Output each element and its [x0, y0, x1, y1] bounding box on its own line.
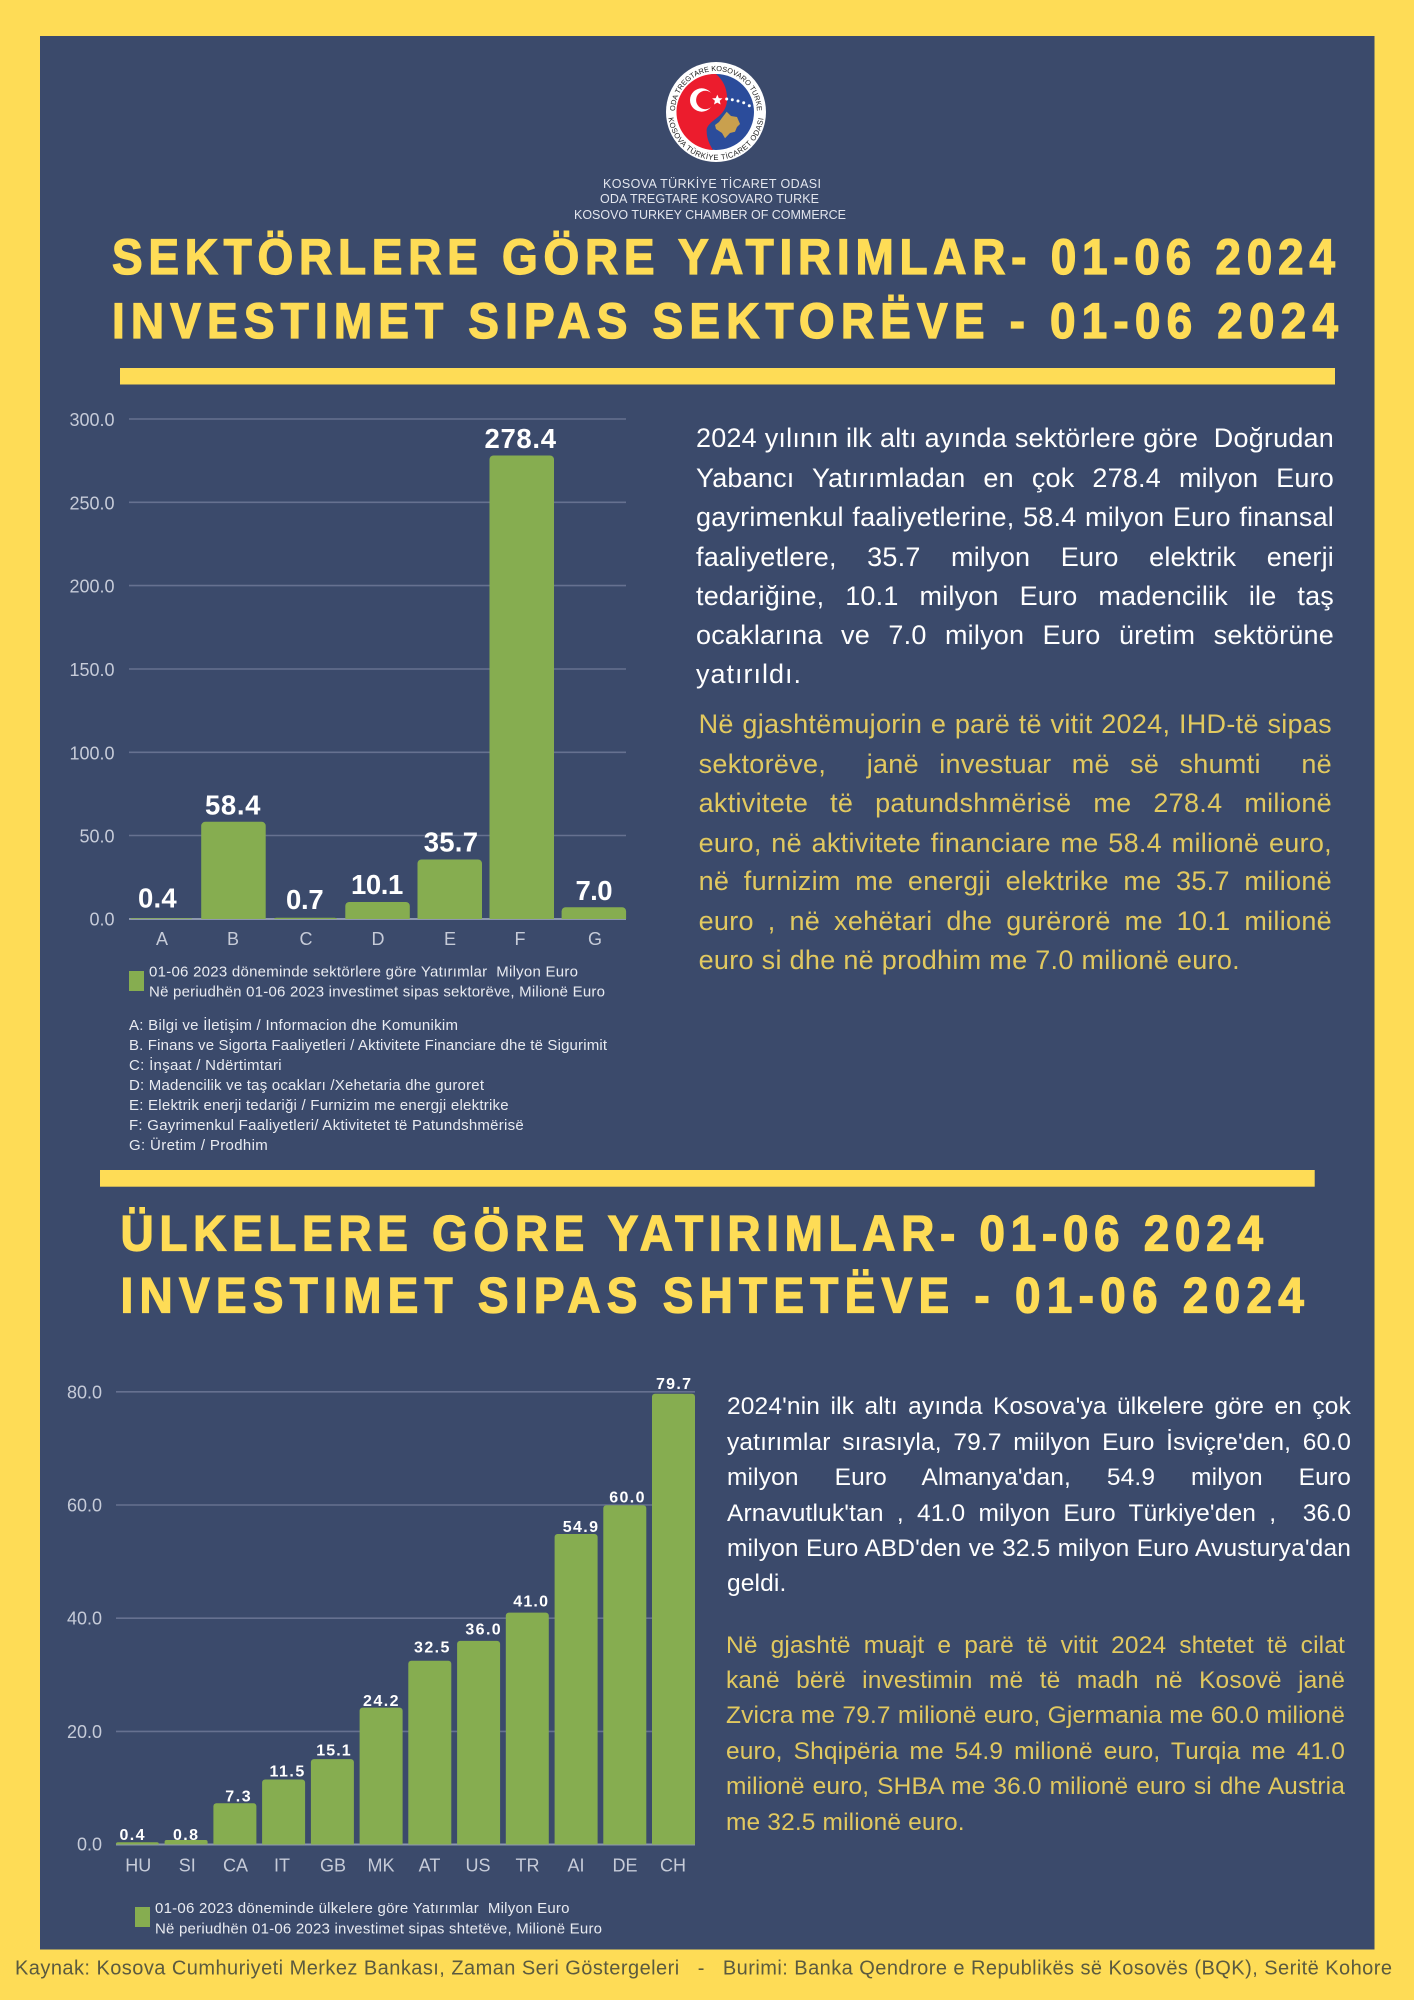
bar chart: sectors — [69, 410, 626, 949]
sector key list: B. Finans ve Sigorta Faaliyetleri / Aktivitete Financiare dhe të Sigurimit — [129, 1037, 608, 1054]
value labels: 0.8 — [173, 1827, 198, 1844]
value labels: 41.0 — [513, 1593, 548, 1610]
value labels: 36.0 — [465, 1622, 501, 1639]
text block: countries Albanian: Zvicra me 79.7 milionë euro, Gjermania me 60.0 milionë — [726, 1702, 1345, 1729]
text block: countries Turkish: yatırımlar sırasıyla, 79.7 miilyon Euro İsviçre'den, 60.0 — [727, 1428, 1351, 1456]
category labels: C — [300, 929, 312, 949]
y axis labels: 100.0 — [69, 743, 114, 763]
legend: sectors — [129, 964, 605, 1001]
text block: sectors Turkish: faaliyetlere, 35.7 milyon Euro elektrik enerji — [696, 542, 1334, 572]
title: sectors: INVESTIMET SIPAS SEKTORËVE - 01-06 2024 — [112, 294, 1338, 349]
sector key list: E: Elektrik enerji tedariği / Furnizim me energji elektrike — [129, 1097, 509, 1114]
y axis labels: 60.0 — [67, 1496, 102, 1516]
text block: countries Turkish: Arnavutluk'tan , 41.0 milyon Euro Türkiye'den , 36.0 — [727, 1500, 1351, 1526]
value labels: 11.5 — [270, 1764, 304, 1780]
value labels: 35.7 — [424, 827, 478, 858]
icon: chamber logo — [666, 62, 766, 162]
value labels: 24.2 — [363, 1693, 399, 1710]
text block: sectors Turkish: Yabancı Yatırımladan en çok 278.4 milyon Euro — [696, 463, 1334, 493]
sector key list: A: Bilgi ve İletişim / Informacion dhe Komunikim — [129, 1016, 458, 1034]
legend: countries: 01-06 2023 döneminde ülkelere göre Yatırımlar Milyon Euro — [155, 1900, 570, 1917]
legend: sectors: Në periudhën 01-06 2023 investimet sipas sektorëve, Milionë Euro — [149, 984, 605, 1001]
bars — [116, 1394, 695, 1855]
category labels: CA — [223, 1856, 248, 1876]
text block: sectors Albanian: euro, në aktivitete financiare me 58.4 milionë euro, — [699, 828, 1332, 858]
category labels: US — [465, 1856, 491, 1876]
text block: countries Turkish: geldi. — [727, 1570, 786, 1597]
value labels: 32.5 — [414, 1640, 449, 1657]
sector key list: F: Gayrimenkul Faaliyetleri/ Aktivitetet të Patundshmërisë — [129, 1117, 524, 1134]
category labels: DE — [612, 1856, 638, 1876]
text block: countries Turkish: 2024'nin ilk altı ayında Kosova'ya ülkelere göre en çok — [727, 1392, 1351, 1420]
text block: sectors Albanian: euro , në xehëtari dhe gurërorë me 10.1 milionë — [699, 906, 1332, 936]
text block: countries Turkish: milyon Euro Almanya'dan, 54.9 milyon Euro — [727, 1464, 1351, 1491]
text block: countries Albanian — [726, 1632, 1345, 1836]
category labels: F — [514, 929, 526, 949]
bar chart: countries — [67, 1376, 695, 1876]
sector key list: G: Üretim / Prodhim — [129, 1136, 268, 1154]
divider rule middle — [100, 1170, 1315, 1187]
value labels: 10.1 — [351, 869, 403, 900]
sector key list: C: İnşaat / Ndërtimtari — [129, 1056, 282, 1074]
text block: sectors Albanian: aktivitete të patundshmërisë me 278.4 milionë — [699, 788, 1332, 818]
title: sectors — [112, 230, 1338, 349]
divider rule top — [120, 368, 1335, 384]
legend: countries — [135, 1900, 602, 1937]
text block: sectors Albanian: Në gjashtëmujorin e parë të vitit 2024, IHD-të sipas — [699, 709, 1332, 739]
text block: countries Albanian: kanë bërë investimin më të madh në Kosovë janë — [726, 1666, 1345, 1694]
y axis labels: 250.0 — [69, 493, 114, 513]
bars — [129, 456, 626, 932]
y axis labels: 200.0 — [69, 577, 114, 597]
category labels: B — [227, 929, 239, 949]
value labels — [120, 1376, 691, 1844]
text block: sectors Albanian: sektorëve, janë investuar më së shumti në — [699, 749, 1332, 779]
organisation names: KOSOVA TÜRKİYE TİCARET ODASI — [603, 177, 821, 191]
category labels: SI — [179, 1856, 196, 1876]
value labels: 15.1 — [316, 1742, 351, 1759]
category labels: E — [444, 929, 456, 949]
legend: countries: Në periudhën 01-06 2023 investimet sipas shtetëve, Milionë Euro — [155, 1920, 602, 1937]
y axis labels: 80.0 — [67, 1382, 102, 1402]
text block: sectors Turkish: yatırıldı. — [696, 659, 802, 689]
sector key list: D: Madencilik ve taş ocakları /Xehetaria dhe guroret — [129, 1077, 485, 1094]
category labels: G — [588, 929, 602, 949]
category labels: A — [156, 929, 168, 949]
y axis labels: 150.0 — [69, 660, 114, 680]
text block: sectors Turkish: tedariğine, 10.1 milyon Euro madencilik ile taş — [696, 581, 1334, 611]
value labels: 0.4 — [138, 883, 177, 914]
category labels: MK — [368, 1856, 394, 1876]
category labels — [156, 929, 602, 949]
category labels: GB — [320, 1856, 346, 1876]
value labels: 60.0 — [609, 1490, 645, 1506]
value labels — [138, 423, 612, 915]
y axis labels: 300.0 — [69, 410, 114, 430]
footer source line: Kaynak: Kosova Cumhuriyeti Merkez Bankası, Zaman Seri Göstergeleri - Burimi: Banka Qendrore e Republikës së Kosovës (BQK), Seritë Kohore — [15, 1958, 1392, 1980]
value labels: 54.9 — [563, 1519, 598, 1536]
y axis labels — [67, 1382, 102, 1855]
text block: countries Albanian: Në gjashtë muajt e parë të vitit 2024 shtetet të cilat — [726, 1632, 1345, 1658]
text block: sectors Turkish — [696, 423, 1334, 689]
category labels: AT — [419, 1856, 440, 1876]
category labels: AI — [567, 1856, 585, 1876]
category labels: IT — [274, 1856, 290, 1876]
value labels: 58.4 — [205, 789, 261, 820]
organisation names: KOSOVO TURKEY CHAMBER OF COMMERCE — [574, 208, 846, 222]
category labels: TR — [516, 1856, 540, 1876]
legend: sectors: 01-06 2023 döneminde sektörlere göre Yatırımlar Milyon Euro — [149, 964, 578, 981]
title: countries: INVESTIMET SIPAS SHTETËVE - 01-06 2024 — [121, 1269, 1304, 1324]
text block: sectors Albanian — [699, 709, 1332, 975]
text block: sectors Turkish: ocaklarına ve 7.0 milyon Euro üretim sektörüne — [696, 620, 1334, 650]
text block: countries Albanian: milionë euro, SHBA me 36.0 milionë euro si dhe Austria — [726, 1773, 1345, 1800]
text block: sectors Turkish: 2024 yılının ilk altı ayında sektörlere göre Doğrudan — [696, 423, 1334, 453]
title: countries — [121, 1207, 1304, 1324]
text block: countries Turkish — [727, 1392, 1351, 1597]
organisation names — [574, 177, 846, 222]
text block: sectors Turkish: gayrimenkul faaliyetlerine, 58.4 milyon Euro finansal — [696, 502, 1334, 532]
category labels: CH — [660, 1856, 686, 1876]
text block: countries Albanian: euro, Shqipëria me 54.9 milionë euro, Turqia me 41.0 — [726, 1738, 1345, 1764]
text block: sectors Albanian: euro si dhe në prodhim me 7.0 milionë euro. — [699, 945, 1240, 975]
value labels: 7.3 — [225, 1788, 251, 1805]
category labels — [125, 1856, 686, 1876]
y axis labels: 50.0 — [79, 826, 114, 846]
organisation names: ODA TREGTARE KOSOVARO TURKE — [600, 192, 819, 206]
sector key list — [129, 1016, 608, 1154]
y axis labels: 0.0 — [89, 910, 114, 930]
y axis labels: 20.0 — [67, 1722, 102, 1742]
value labels: 7.0 — [576, 875, 612, 906]
title: countries: ÜLKELERE GÖRE YATIRIMLAR- 01-06 2024 — [121, 1207, 1263, 1262]
text block: sectors Albanian: në furnizim me energji elektrike me 35.7 milionë — [699, 866, 1332, 896]
text block: countries Albanian: me 32.5 milionë euro. — [726, 1809, 965, 1836]
value labels: 0.7 — [286, 884, 324, 915]
category labels: HU — [125, 1856, 151, 1876]
value labels: 79.7 — [656, 1376, 691, 1393]
icon: chamber logo: KOSOVA TÜRKİYE TİCARET ODASI — [668, 118, 764, 160]
category labels: D — [372, 929, 384, 949]
y axis labels — [69, 410, 114, 930]
title: sectors: SEKTÖRLERE GÖRE YATIRIMLAR- 01-06 2024 — [112, 230, 1335, 285]
value labels: 0.4 — [120, 1827, 145, 1844]
text block: countries Turkish: milyon Euro ABD'den ve 32.5 milyon Euro Avusturya'dan — [727, 1535, 1351, 1562]
icon: chamber logo: ODA TREGTARE KOSOVARO TURKE — [670, 66, 762, 111]
y axis labels: 40.0 — [67, 1609, 102, 1629]
value labels: 278.4 — [484, 423, 557, 454]
y axis labels: 0.0 — [77, 1835, 102, 1855]
